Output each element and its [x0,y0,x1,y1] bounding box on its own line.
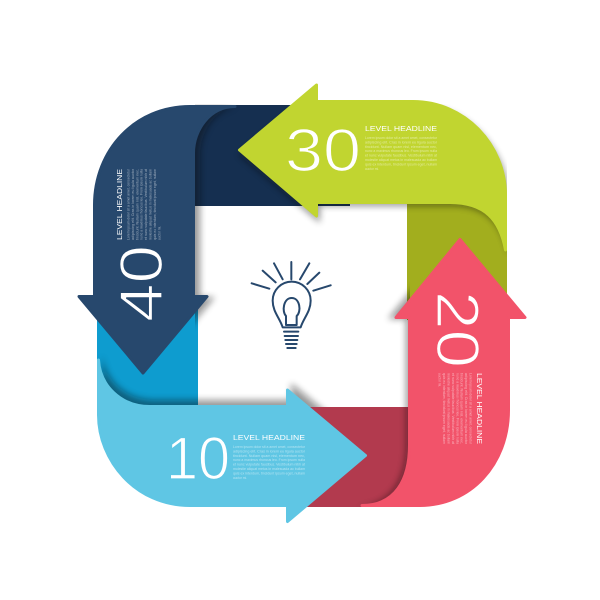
fold: dark red [300,407,411,507]
number 30: 30 [285,117,361,184]
body text: tincidunt. Nullam quam nisl, elementum nec, [233,453,305,458]
number 10: 10 [166,425,230,492]
body text: nunc a maximus rhoncus leo. From ipsum nulla [139,168,144,240]
body text: auctor mi. [233,475,247,480]
body text: et nunc vulputate faucibus. Vestibulum nibh at [143,168,148,240]
number 20: 20 [424,291,491,368]
body text: molestie aliquat metus in malesuada ac bullam [148,168,152,240]
fold: dark blue [97,295,198,405]
body text: molestie aliquat metus in malesuada ac bullam [233,466,306,471]
body text: et nunc vulputate faucibus. Vestibulum nibh at [451,373,456,445]
headline: LEVEL HEADLINE [117,169,124,240]
arrow: green 30 [240,85,506,250]
body text: Lorem ipsum dolor sit a amet amet, consectetur [468,373,474,445]
body text: quis ex interdum, tincidunt ipsum eget, nullam [233,470,306,475]
fold: dark navy [195,105,350,206]
arrow: navy 40 [79,106,235,373]
number 40: 40 [108,245,175,322]
body text: auctor mi. [438,373,443,387]
shadow: green arrow [240,106,507,252]
body text [365,135,438,171]
body text: adipiscing elit. Cras in lorem eu ligula auctor [365,139,438,144]
body text: tincidunt. Nullam quam nisl, elementum nec, [365,144,437,149]
body text: molestie aliquat metus in malesuada ac bullam [365,157,438,162]
body text: auctor mi. [156,226,161,240]
body text: tincidunt. Nullam quam nisl, elementum nec, [134,169,139,240]
body text: adipiscing elit. Cras in lorem eu ligula auctor [130,168,135,240]
body text: adipiscing elit. Cras in lorem eu ligula auctor [464,373,469,445]
body text: quis ex interdum, tincidunt ipsum eget, nullam [442,373,447,445]
shadow: navy arrow [195,104,232,328]
body text [438,373,474,445]
body text: quis ex interdum, tincidunt ipsum eget, nullam [152,168,157,240]
body text: adipiscing elit. Cras in lorem eu ligula auctor [233,448,306,453]
body text: quis ex interdum, tincidunt ipsum eget, nullam [365,161,438,166]
headline: LEVEL HEADLINE [475,373,482,444]
body text: et nunc vulputate faucibus. Vestibulum nibh at [365,153,438,158]
fold: dark green [407,201,507,320]
shadow: red arrow [367,286,410,504]
shadow: blue arrow [100,359,327,407]
body text: Lorem ipsum dolor sit a amet amet, consectetur [126,168,130,240]
arrow: blue 10 [98,360,366,522]
body text: nunc a maximus rhoncus leo. From ipsum nulla [365,148,438,153]
body text: Lorem ipsum dolor sit a amet amet, consectetur [365,135,438,140]
body text: tincidunt. Nullam quam nisl, elementum nec, [460,373,465,444]
body text: molestie aliquat metus in malesuada ac bullam [446,373,452,445]
body text: et nunc vulputate faucibus. Vestibulum nibh at [233,462,306,467]
headline: LEVEL HEADLINE [365,126,437,133]
body text: nunc a maximus rhoncus leo. From ipsum nulla [455,373,460,445]
headline: LEVEL HEADLINE [233,435,305,442]
panel: center white square [198,205,407,407]
body text: nunc a maximus rhoncus leo. From ipsum nulla [233,457,306,462]
body text [233,444,306,480]
body text [126,168,161,240]
icon: light bulb [252,262,331,348]
arrow: red 20 [362,240,525,506]
body text: auctor mi. [365,166,379,171]
body text: Lorem ipsum dolor sit a amet amet, consectetur [233,444,306,449]
